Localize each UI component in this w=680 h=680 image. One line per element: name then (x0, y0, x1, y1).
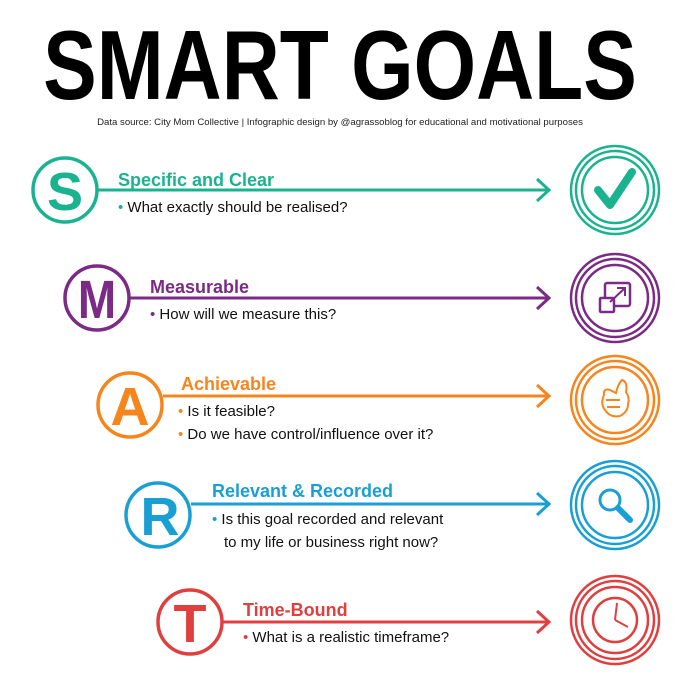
arrow S (98, 179, 549, 201)
arrow A (163, 385, 549, 407)
letter circle R (126, 483, 190, 547)
bullet R: • Is this goal recorded and relevant (212, 511, 444, 528)
icon: thumbs up (571, 356, 659, 444)
row: S specific (33, 146, 659, 234)
row: T time-bound (158, 576, 659, 664)
bullet R: to my life or business right now? (224, 534, 438, 551)
title: SMART GOALS (43, 10, 637, 120)
letter circle A: A (110, 377, 150, 437)
heading T: Time-Bound (243, 600, 348, 620)
arrow R (191, 493, 549, 515)
bullets A: • Is it feasible? (178, 403, 275, 420)
icon: clock (571, 576, 659, 664)
letter circle T (158, 590, 222, 654)
heading S: Specific and Clear (118, 170, 274, 190)
row: M measurable (65, 254, 659, 342)
bullet T: • What is a realistic timeframe? (243, 629, 449, 646)
letter circle S: S (47, 162, 83, 222)
arrow M (130, 287, 549, 309)
letter circle T: T (174, 594, 206, 654)
bullet S: • What exactly should be realised? (118, 199, 348, 216)
letter circle M: M (78, 270, 116, 330)
bullets A: • Do we have control/influence over it? (178, 426, 433, 443)
letter circle A (98, 373, 162, 437)
bullet M: • How will we measure this? (150, 306, 336, 323)
bullet R (212, 511, 444, 551)
icon: resize (571, 254, 659, 342)
icon: magnifier (571, 461, 659, 549)
arrow T (223, 611, 549, 633)
letter circle R: R (140, 487, 180, 547)
heading A: Achievable (181, 374, 276, 394)
icon: check (571, 146, 659, 234)
heading R: Relevant & Recorded (212, 481, 393, 501)
row: A achievable (98, 356, 659, 444)
heading M: Measurable (150, 277, 249, 297)
row: R relevant (126, 461, 659, 551)
subtitle: Data source: City Mom Collective | Infographic design by @agrassoblog for educational and motivational purposes (97, 117, 583, 128)
letter circle S (33, 158, 97, 222)
letter circle M (65, 266, 129, 330)
bullets A (178, 403, 433, 443)
